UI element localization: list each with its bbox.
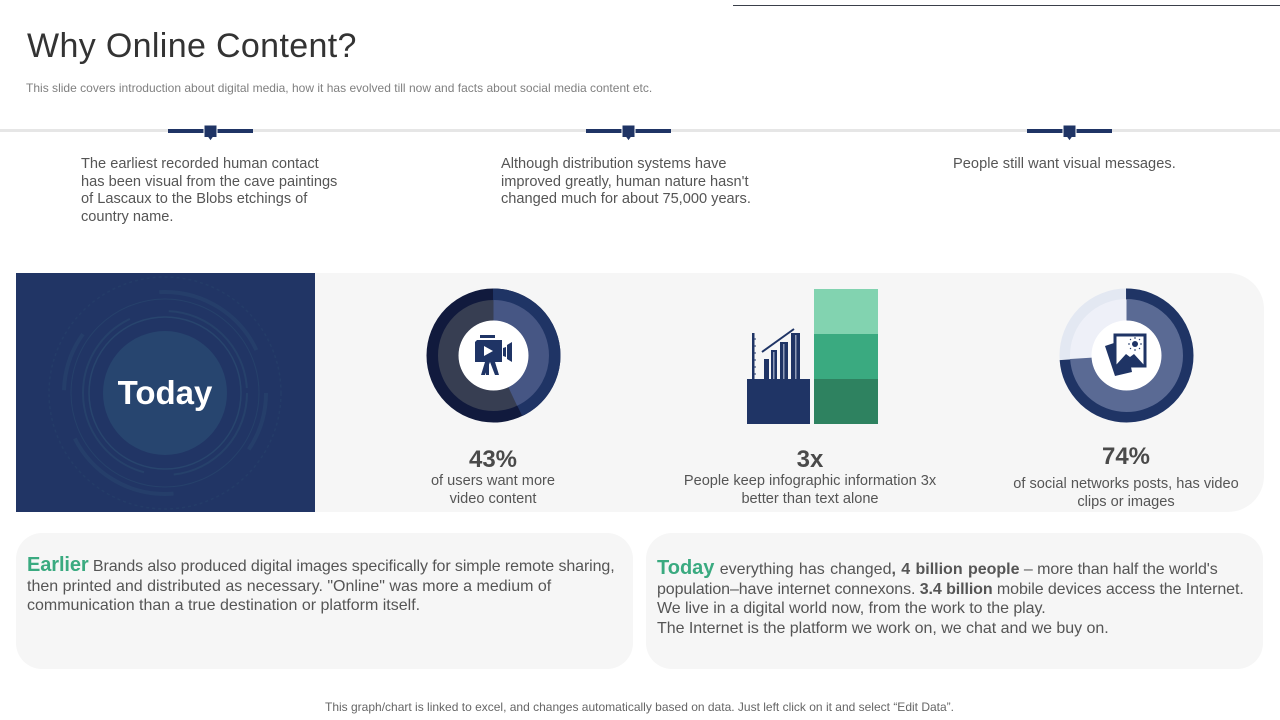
text: earlier xyxy=(27,554,615,614)
icon: video camera xyxy=(475,335,512,375)
panel: today detail xyxy=(646,533,1263,669)
text: point 3: People still want visual messages. xyxy=(953,156,1176,172)
text: point 1: of Lascaux to the Blobs etchings of xyxy=(81,191,307,207)
text: today detail: The Internet is the platform we work on, we chat and we buy on. xyxy=(657,620,1109,637)
stat: 43%: 43% xyxy=(469,446,517,473)
panel: statistics background xyxy=(315,273,1264,512)
text: earlier: Earlier Brands also produced digital images specifically for simple remote sharing, xyxy=(27,554,615,576)
stat: 74% xyxy=(1013,443,1239,510)
title: Why Online Content? xyxy=(27,27,357,65)
subtitle: This slide covers introduction about digital media, how it has evolved till now and facts about social media content etc. xyxy=(26,81,652,95)
text: today detail xyxy=(657,557,1244,637)
icon: growth bars xyxy=(752,329,800,379)
footnote: This graph/chart is linked to excel, and changes automatically based on data. Just left click on it and select “Edit Data”. xyxy=(325,700,954,714)
stat: 3x: 3x xyxy=(797,446,823,473)
chart: 74% donut xyxy=(1060,288,1194,422)
text: earlier: then printed and distributed as necessary. "Online" was more a medium of xyxy=(27,578,551,595)
chart: 3x stacked bars xyxy=(747,289,878,424)
text: earlier: communication than a true destination or platform itself. xyxy=(27,597,420,614)
text: point 1: has been visual from the cave paintings xyxy=(81,174,337,190)
stat: 74%: clips or images xyxy=(1077,494,1175,510)
text: point 2: changed much for about 75,000 years. xyxy=(501,191,751,207)
text: today detail: population–have internet connexons. 3.4 billion mobile devices access the Internet. xyxy=(657,581,1244,598)
marker: point 2 xyxy=(586,126,671,140)
stat: 43%: video content xyxy=(450,491,536,507)
text: today detail: Today everything has changed, 4 billion people – more than half the world's xyxy=(657,557,1218,579)
text: point 2 xyxy=(501,156,751,207)
chart: 43% donut xyxy=(426,288,560,422)
text: point 1: The earliest recorded human contact xyxy=(81,156,319,172)
stat: 43% xyxy=(431,446,555,507)
panel: earlier xyxy=(16,533,633,669)
text: point 2: improved greatly, human nature hasn't xyxy=(501,174,749,190)
stat: 3x: better than text alone xyxy=(741,491,879,507)
text: point 1 xyxy=(81,156,337,225)
marker: point 3 xyxy=(1027,126,1112,140)
panel: today: Today xyxy=(118,374,213,411)
text: today detail: We live in a digital world now, from the work to the play. xyxy=(657,600,1046,617)
stat: 3x xyxy=(684,446,936,507)
text: point 1: country name. xyxy=(81,209,173,225)
stat: 74%: of social networks posts, has video xyxy=(1013,476,1239,492)
stat: 74%: 74% xyxy=(1102,443,1150,470)
panel: today xyxy=(16,273,315,512)
stat: 3x: People keep infographic information 3x xyxy=(684,473,936,489)
stat: 43%: of users want more xyxy=(431,473,555,489)
icon: photos xyxy=(1105,335,1145,376)
text: point 2: Although distribution systems have xyxy=(501,156,727,172)
marker: point 1 xyxy=(168,126,253,140)
